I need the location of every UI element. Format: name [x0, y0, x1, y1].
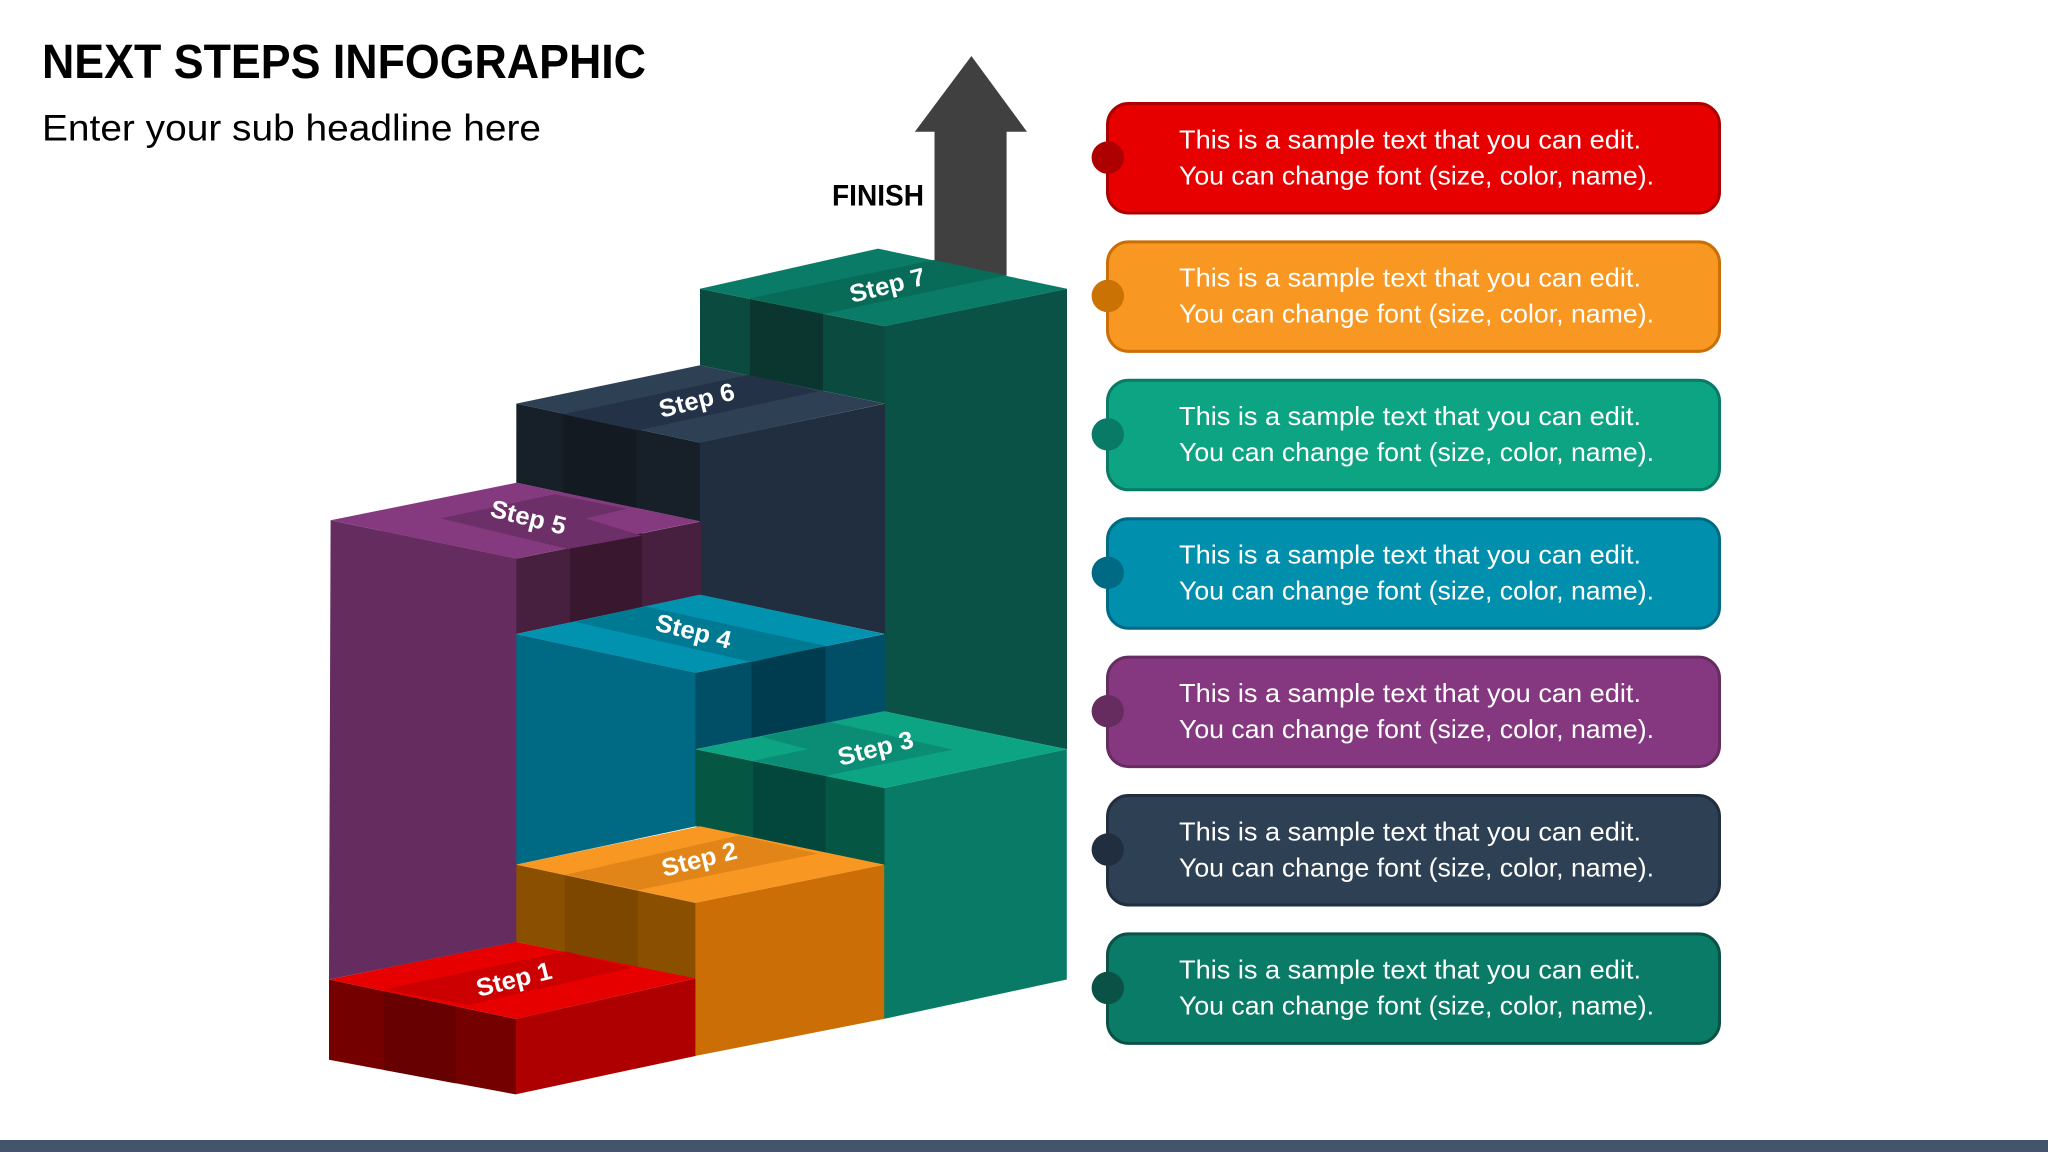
text card: navy — [1092, 796, 1720, 905]
subtitle: Enter your sub headline here — [42, 108, 541, 148]
step 5 block: Step 5 — [487, 495, 569, 541]
staircase chart — [329, 249, 1067, 1094]
text card: teal — [1092, 380, 1720, 490]
text card: green — [1092, 934, 1720, 1043]
text card: purple — [1092, 657, 1720, 767]
text card: red: You can change font (size, color, name). — [1179, 160, 1654, 190]
text card: orange: You can change font (size, color, name). — [1179, 299, 1654, 329]
step 7 block — [700, 249, 1067, 749]
finish label: FINISH — [832, 179, 924, 212]
text card: teal: You can change font (size, color, name). — [1179, 437, 1654, 467]
step 1 block — [329, 942, 695, 1094]
text card: red — [1092, 104, 1720, 213]
text card: teal: This is a sample text that you can edit. — [1179, 401, 1641, 431]
step 3 block: Step 3 — [835, 726, 916, 772]
step 7 block: Step 7 — [847, 263, 928, 309]
bottom bar — [0, 1140, 2048, 1152]
step 3 block — [695, 711, 1067, 1019]
text card: blue: You can change font (size, color, name). — [1179, 576, 1654, 606]
text card: orange — [1092, 242, 1720, 351]
step 2 block: Step 2 — [659, 837, 740, 883]
text card: orange: This is a sample text that you can edit. — [1179, 263, 1641, 293]
text card: blue: This is a sample text that you can edit. — [1179, 540, 1641, 570]
text card: red: This is a sample text that you can edit. — [1179, 124, 1641, 154]
step 6 block: Step 6 — [656, 378, 738, 424]
step 6 block — [516, 365, 885, 634]
text card: blue — [1092, 519, 1720, 628]
text card: navy: You can change font (size, color, name). — [1179, 852, 1654, 882]
step 2 block — [516, 826, 884, 1056]
icon: finish arrow — [915, 56, 1027, 276]
text card: navy: This is a sample text that you can edit. — [1179, 816, 1641, 846]
title: NEXT STEPS INFOGRAPHIC — [42, 36, 646, 89]
text card: purple: This is a sample text that you can edit. — [1179, 678, 1641, 708]
step 1 block: Step 1 — [473, 957, 555, 1003]
step 4 block: Step 4 — [653, 609, 734, 655]
step 5 block — [329, 483, 701, 980]
text card: purple: You can change font (size, color, name). — [1179, 714, 1654, 744]
text card: green: You can change font (size, color, name). — [1179, 991, 1654, 1021]
text card: green: This is a sample text that you can edit. — [1179, 955, 1641, 985]
step 4 block — [516, 595, 885, 865]
